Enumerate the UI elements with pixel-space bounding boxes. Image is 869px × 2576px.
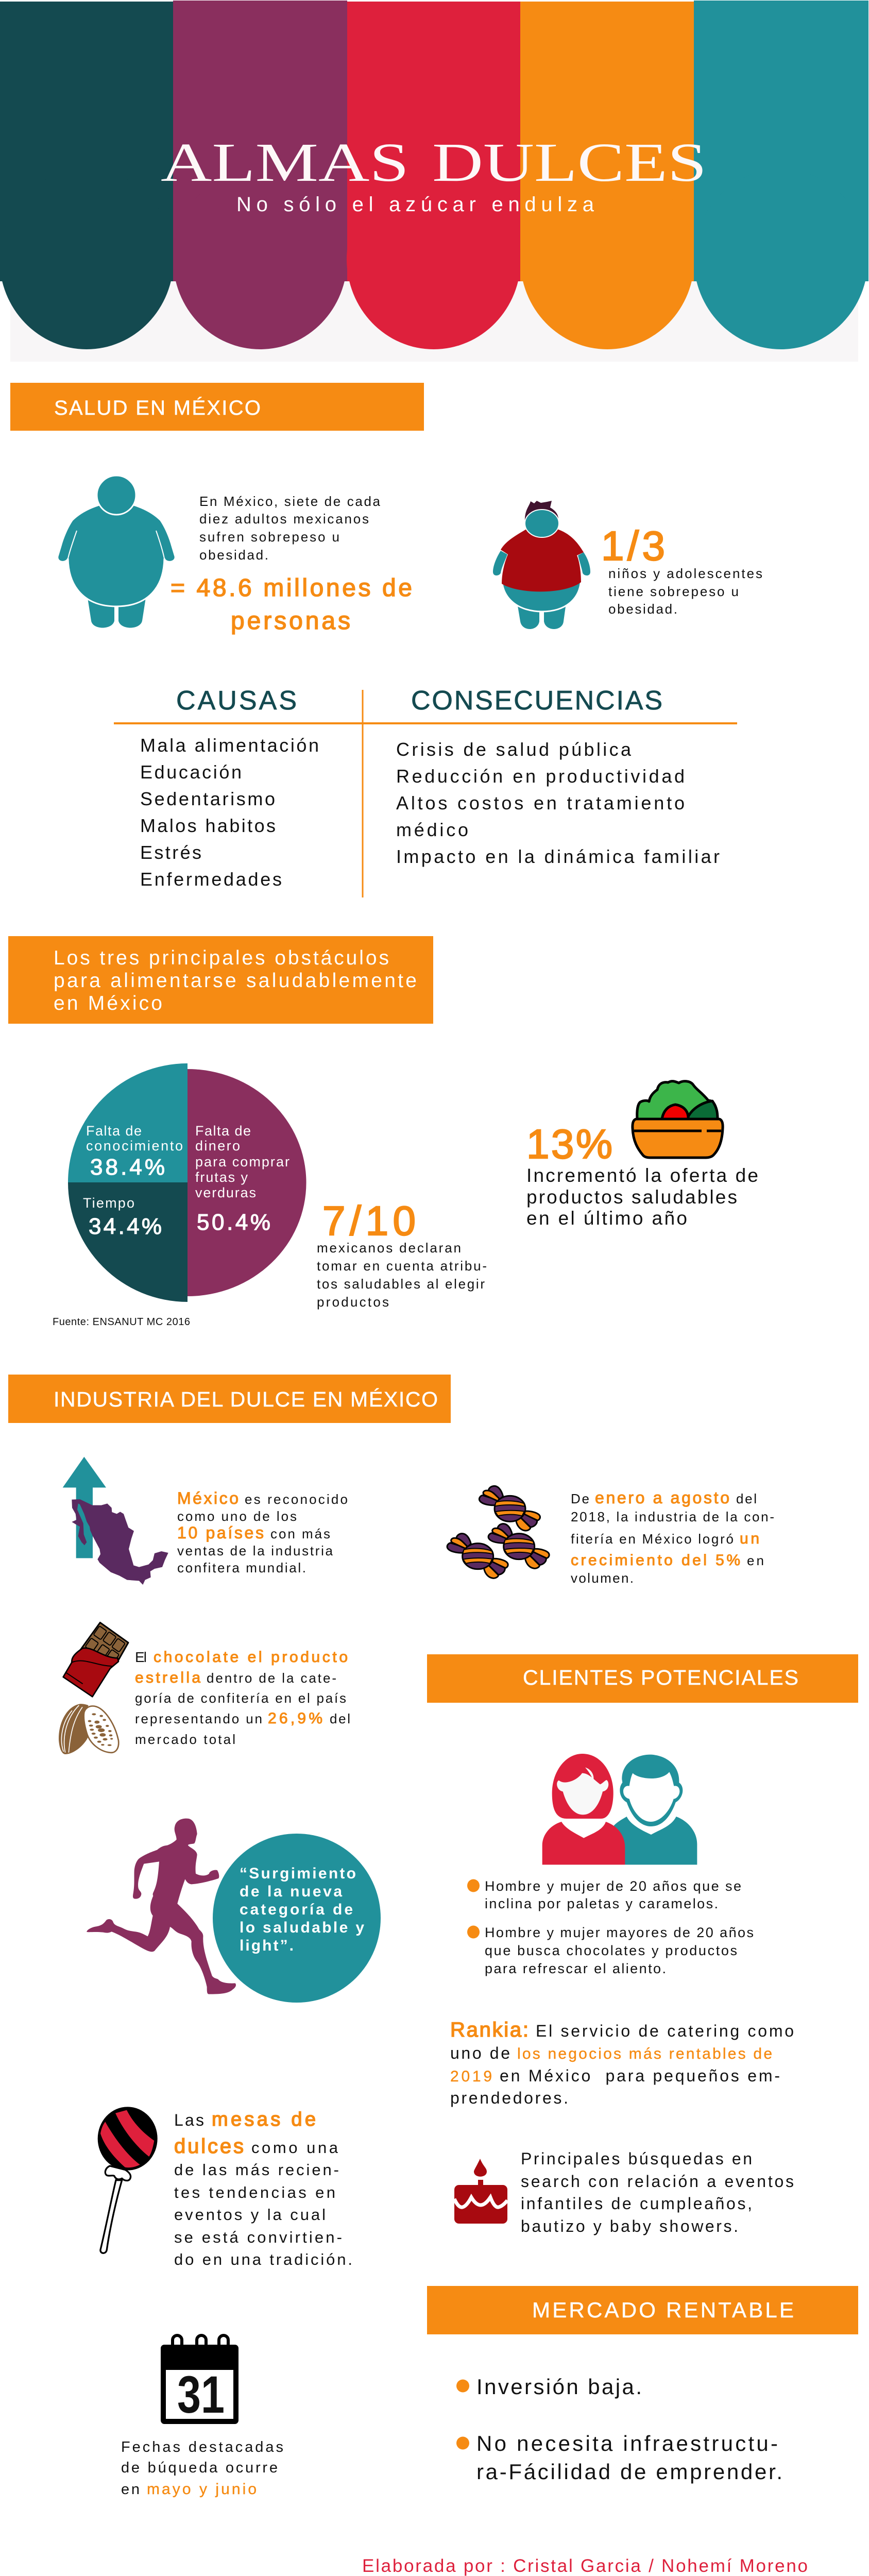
text: chocolate estrella: estrella bbox=[135, 1669, 200, 1686]
text: crecimiento 5%: De bbox=[571, 1491, 589, 1506]
list: customer profiles: que busca chocolates y productos bbox=[485, 1943, 737, 1958]
list: mercado rentable: No necesita infraestructu- bbox=[476, 2431, 778, 2455]
text: México top 10: ventas de la industria bbox=[177, 1543, 333, 1558]
chart: pie of obstacles: 38.4% bbox=[90, 1155, 165, 1180]
table: causas y consecuencias: Estrés bbox=[140, 842, 201, 863]
list: mercado rentable bbox=[456, 2375, 782, 2484]
heading: clientes potenciales: CLIENTES POTENCIALES bbox=[523, 1666, 798, 1689]
text: adults statistic: En México, siete de cada bbox=[199, 494, 381, 509]
heading: tres obstáculos bbox=[8, 936, 433, 1024]
heading: tres obstáculos: en México bbox=[54, 992, 162, 1014]
text: fechas destacadas bbox=[121, 2439, 283, 2498]
text: crecimiento 5%: del bbox=[736, 1491, 757, 1506]
text: principales búsquedas: infantiles de cumpleaños, bbox=[521, 2194, 752, 2213]
text: crecimiento 5% bbox=[571, 1488, 774, 1586]
text: mesas de dulces: do en una tradición. bbox=[174, 2250, 352, 2268]
text: adults statistic bbox=[199, 494, 381, 563]
chart: pie of obstacles: Falta de bbox=[86, 1123, 142, 1139]
callout: 48.6 millones bbox=[171, 574, 412, 635]
text: mesas de dulces: tes tendencias en bbox=[174, 2183, 335, 2201]
table: causas y consecuencias: Mala alimentación bbox=[140, 735, 319, 756]
icon: candies bbox=[447, 1486, 549, 1578]
stat: 13%: Incrementó la oferta de bbox=[526, 1165, 758, 1186]
table: causas y consecuencias: Altos costos en tratamiento bbox=[396, 792, 685, 814]
table: causas y consecuencias: Malos habitos bbox=[140, 815, 276, 836]
chart: pie of obstacles: 34.4% bbox=[89, 1214, 162, 1239]
text: crecimiento 5%: 2018, la industria de la con- bbox=[571, 1509, 774, 1524]
callout: saludable y light: light”. bbox=[240, 1937, 294, 1954]
text: chocolate estrella bbox=[135, 1649, 350, 1747]
text: fechas destacadas: Fechas destacadas bbox=[121, 2439, 283, 2455]
stat: 13%: en el último año bbox=[526, 1208, 687, 1229]
heading: industria del dulce: INDUSTRIA DEL DULCE EN MÉXICO bbox=[54, 1387, 438, 1411]
heading: mercado rentable: MERCADO RENTABLE bbox=[532, 2298, 794, 2322]
text: crecimiento 5%: crecimiento del 5% bbox=[571, 1552, 740, 1569]
text: mesas de dulces: como una bbox=[251, 2139, 338, 2157]
title: DULCES bbox=[432, 132, 707, 193]
stat: 1/3 children: niños y adolescentes bbox=[608, 566, 762, 581]
text: fechas destacadas: mayo y junio bbox=[147, 2481, 257, 2498]
heading: tres obstáculos: Los tres principales obstáculos bbox=[54, 947, 389, 969]
table: causas y consecuencias: CONSECUENCIAS bbox=[411, 686, 662, 716]
callout: saludable y light: categoría de bbox=[240, 1901, 353, 1918]
icon: birthday cake bbox=[454, 2159, 507, 2224]
text: México top 10: México bbox=[177, 1489, 238, 1507]
list: mercado rentable: ra-Fácilidad de emprender. bbox=[476, 2460, 782, 2484]
text: crecimiento 5%: fitería en México logró bbox=[571, 1531, 734, 1547]
list: customer profiles: Hombre y mujer de 20 años que se bbox=[485, 1878, 741, 1894]
text: chocolate estrella: 26,9% bbox=[268, 1710, 322, 1727]
chart: pie of obstacles: dinero bbox=[195, 1138, 240, 1154]
text: Rankia: El servicio de catering como bbox=[536, 2022, 794, 2040]
text: crecimiento 5%: un bbox=[740, 1530, 759, 1547]
stat: 13% bbox=[526, 1121, 758, 1229]
heading: clientes potenciales bbox=[427, 1654, 858, 1703]
callout: 48.6 millones: personas bbox=[231, 607, 350, 635]
source note: Fuente: ENSANUT MC 2016 bbox=[53, 1316, 190, 1328]
text: crecimiento 5%: enero a agosto bbox=[595, 1488, 729, 1507]
icon: calendar: 31 bbox=[177, 2365, 225, 2424]
callout: saludable y light: “Surgimiento bbox=[240, 1865, 356, 1882]
chart: pie of obstacles: Falta de bbox=[195, 1123, 251, 1139]
icon: lollipop bbox=[98, 2107, 158, 2253]
stat: 1/3 children: tiene sobrepeso u bbox=[608, 584, 739, 599]
stat: 7/10: productos bbox=[317, 1294, 389, 1310]
icon: obese adult bbox=[58, 476, 175, 628]
text: crecimiento 5%: en bbox=[747, 1553, 764, 1568]
text: Rankia bbox=[450, 2019, 794, 2107]
heading: tres obstáculos: para alimentarse saludablemente bbox=[54, 970, 417, 992]
footer credit: Elaborada por : Cristal Garcia / Nohemí Moreno bbox=[362, 2556, 808, 2576]
list: customer profiles: Hombre y mujer mayores de 20 años bbox=[485, 1925, 754, 1940]
stat: 1/3 children bbox=[601, 523, 762, 617]
icon: runner bbox=[87, 1819, 236, 1994]
heading: salud en México: SALUD EN MÉXICO bbox=[54, 396, 261, 419]
text: México top 10: con más bbox=[270, 1526, 330, 1541]
text: Rankia: en México para pequeños em- bbox=[500, 2066, 780, 2085]
text: México top 10: como uno de los bbox=[177, 1509, 297, 1524]
list: customer profiles: inclina por paletas y caramelos. bbox=[485, 1896, 718, 1911]
text: chocolate estrella: chocolate el producto bbox=[154, 1649, 348, 1666]
text: chocolate estrella: representando un bbox=[135, 1711, 262, 1726]
text: mesas de dulces: de las más recien- bbox=[174, 2161, 339, 2179]
text: Rankia: 2019 bbox=[450, 2068, 492, 2085]
text: mesas de dulces: Las bbox=[174, 2111, 204, 2129]
icon: chocolate bar bbox=[63, 1622, 128, 1697]
table: causas y consecuencias: Reducción en productividad bbox=[396, 766, 685, 787]
text: Rankia: los negocios más rentables de bbox=[517, 2045, 772, 2062]
callout: saludable y light: lo saludable y bbox=[240, 1919, 364, 1936]
stat: 1/3 children: obesidad. bbox=[608, 601, 677, 617]
title bbox=[161, 132, 707, 193]
icon: salad bowl bbox=[633, 1081, 723, 1158]
text: chocolate estrella: El bbox=[135, 1649, 147, 1665]
text: mesas de dulces: eventos y la cual bbox=[174, 2206, 326, 2224]
table: causas y consecuencias: Educación bbox=[140, 761, 242, 783]
chart: pie of obstacles: frutas y bbox=[195, 1170, 248, 1185]
heading: industria del dulce bbox=[8, 1375, 451, 1423]
text: México top 10 bbox=[177, 1489, 348, 1575]
heading: salud en México bbox=[10, 383, 424, 431]
chart: pie of obstacles bbox=[68, 1063, 306, 1302]
table: causas y consecuencias: médico bbox=[396, 819, 468, 840]
list: customer profiles: para refrescar el aliento. bbox=[485, 1961, 666, 1976]
text: chocolate estrella: goría de confitería en el país bbox=[135, 1690, 346, 1706]
icon: arrow and map of Mexico bbox=[63, 1457, 168, 1585]
table: causas y consecuencias: Impacto en la dinámica familiar bbox=[396, 846, 720, 867]
text: Rankia: prendedores. bbox=[450, 2089, 568, 2107]
icon: man and woman bbox=[542, 1754, 697, 1865]
icon: cacao pods bbox=[59, 1704, 118, 1754]
text: adults statistic: sufren sobrepeso u bbox=[199, 529, 339, 545]
title: ALMAS bbox=[161, 132, 409, 193]
text: fechas destacadas: en bbox=[121, 2481, 140, 2498]
stat: 13%: 13% bbox=[526, 1121, 612, 1167]
text: mesas de dulces: se está convirtien- bbox=[174, 2228, 342, 2246]
panel: awning header bbox=[0, 1, 868, 362]
chart: pie of obstacles: 50.4% bbox=[197, 1210, 270, 1235]
icon: obese child bbox=[493, 501, 590, 629]
callout: saludable y light: de la nueva bbox=[240, 1883, 342, 1900]
heading: mercado rentable bbox=[427, 2286, 858, 2334]
table: causas y consecuencias: Sedentarismo bbox=[140, 788, 275, 809]
stat: 7/10: tos saludables al elegir bbox=[317, 1276, 485, 1292]
table: causas y consecuencias: Crisis de salud pública bbox=[396, 739, 632, 760]
text: mesas de dulces: dulces bbox=[174, 2135, 244, 2158]
text: principales búsquedas: search con relación a eventos bbox=[521, 2172, 794, 2191]
text: chocolate estrella: mercado total bbox=[135, 1732, 235, 1747]
stat: 7/10: tomar en cuenta atribu- bbox=[317, 1258, 487, 1274]
text: México top 10: es reconocido bbox=[245, 1492, 348, 1507]
icon: calendar bbox=[161, 2335, 238, 2424]
chart: pie of obstacles: verduras bbox=[195, 1185, 256, 1200]
stat: 13%: productos saludables bbox=[526, 1187, 737, 1208]
chart: pie of obstacles: para comprar bbox=[195, 1154, 289, 1170]
chart: pie of obstacles: Tiempo bbox=[83, 1195, 134, 1211]
stat: 7/10: mexicanos declaran bbox=[317, 1240, 461, 1256]
list: customer profiles bbox=[467, 1878, 754, 1976]
text: Rankia: uno de bbox=[450, 2044, 510, 2062]
text: México top 10: confitera mundial. bbox=[177, 1560, 306, 1575]
text: Rankia: Rankia: bbox=[450, 2019, 529, 2041]
text: crecimiento 5%: volumen. bbox=[571, 1570, 634, 1586]
callout: 48.6 millones: = 48.6 millones de bbox=[171, 574, 412, 602]
text: adults statistic: obesidad. bbox=[199, 547, 268, 563]
callout: saludable y light bbox=[213, 1834, 381, 2003]
text: principales búsquedas bbox=[521, 2149, 794, 2235]
text: mesas de dulces: mesas de bbox=[212, 2109, 316, 2130]
table: causas y consecuencias: CAUSAS bbox=[176, 686, 297, 716]
text: México top 10: 10 países bbox=[177, 1523, 264, 1542]
subtitle: No sólo el azúcar endulza bbox=[236, 193, 594, 216]
list: mercado rentable: Inversión baja. bbox=[476, 2375, 642, 2399]
stat: 7/10 bbox=[317, 1198, 487, 1310]
table: causas y consecuencias bbox=[114, 686, 737, 897]
text: mesas de dulces bbox=[174, 2109, 352, 2268]
stat: 7/10: 7/10 bbox=[322, 1198, 416, 1244]
stat: 1/3 children: 1/3 bbox=[601, 523, 665, 569]
text: adults statistic: diez adultos mexicanos bbox=[199, 511, 369, 527]
text: fechas destacadas: de búqueda ocurre bbox=[121, 2460, 278, 2476]
text: principales búsquedas: bautizo y baby showers. bbox=[521, 2217, 738, 2235]
table: causas y consecuencias: Enfermedades bbox=[140, 869, 282, 890]
text: principales búsquedas: Principales búsquedas en bbox=[521, 2149, 752, 2168]
text: chocolate estrella: dentro de la cate- bbox=[207, 1670, 336, 1686]
text: chocolate estrella: del bbox=[330, 1711, 350, 1726]
chart: pie of obstacles: conocimiento bbox=[86, 1138, 183, 1154]
